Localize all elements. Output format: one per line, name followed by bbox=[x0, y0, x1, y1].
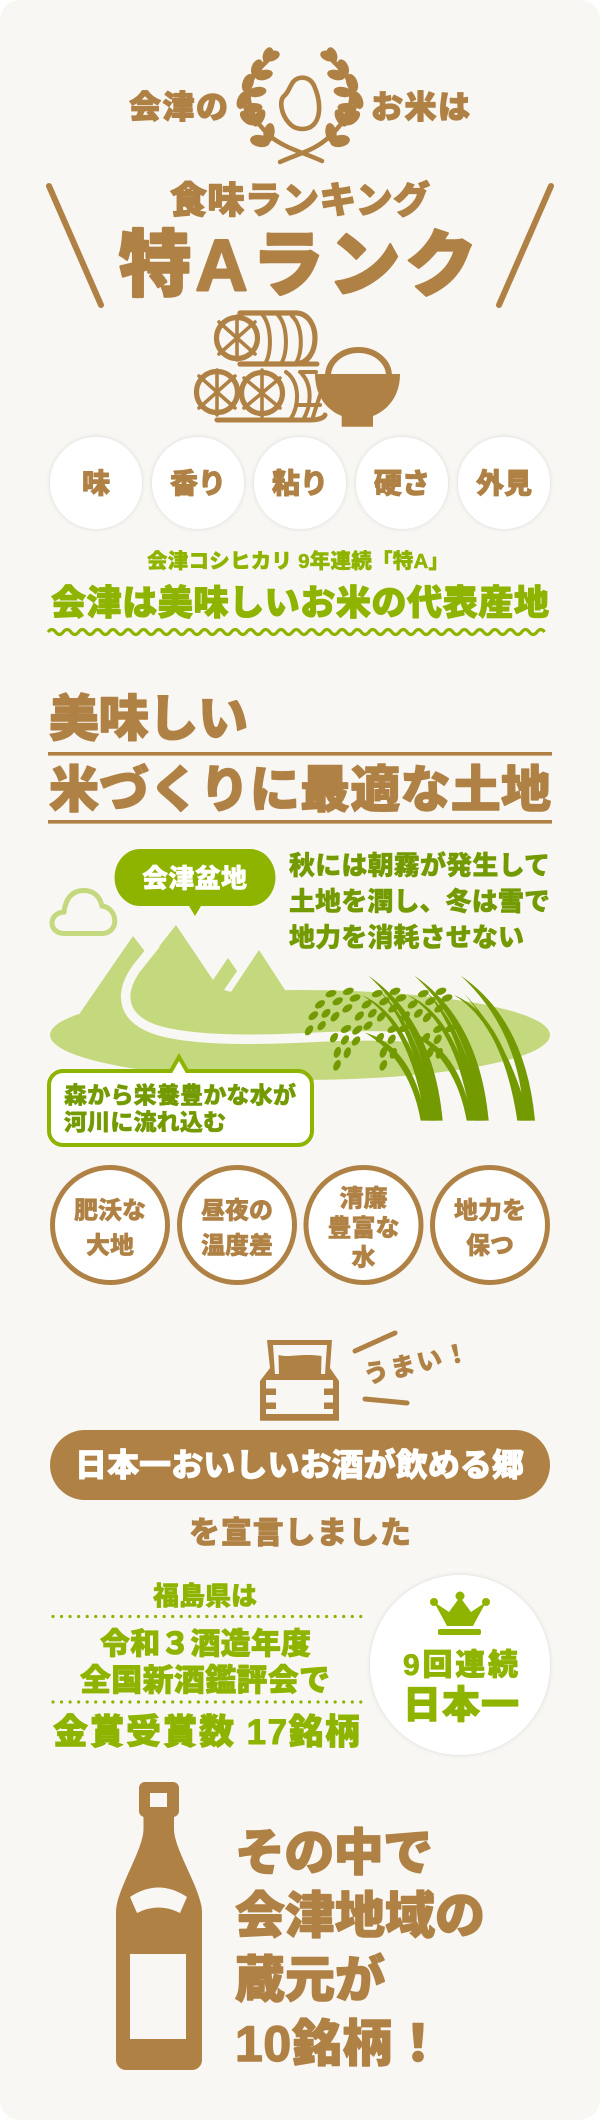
banner: best sake in Japan: 日本一おいしいお酒が飲める郷 bbox=[75, 1447, 524, 1483]
heading: 特Aランク: 特Aランク bbox=[119, 226, 477, 306]
text: 9 years Tokua: 会津コシヒカリ 9年連続「特A」 bbox=[147, 549, 449, 573]
text: 会津の: 会津の bbox=[129, 89, 228, 125]
icon: cloud bbox=[52, 890, 115, 934]
heading: 米づくりに最適な土地: 米づくりに最適な土地 bbox=[49, 762, 551, 818]
closing text: 蔵元が bbox=[235, 1952, 385, 2008]
accent: lower stroke bbox=[365, 1399, 407, 1403]
closing text: 10銘柄！ bbox=[235, 2016, 443, 2072]
text: morning mist description bbox=[289, 850, 550, 952]
text: 全国新酒鑑評会で: 全国新酒鑑評会で bbox=[80, 1663, 330, 1698]
feature circle: 清廉豊富な水 bbox=[306, 1168, 421, 1282]
divider: lower dots bbox=[53, 1700, 363, 1704]
accent: right slash bbox=[499, 186, 551, 305]
badge: 9回連続日本一: 日本一 bbox=[403, 1685, 519, 1727]
callout: forest water: 河川に流れ込む bbox=[64, 1109, 226, 1135]
closing text: その中で bbox=[235, 1825, 433, 1881]
divider: upper dots bbox=[53, 1615, 363, 1618]
feature circle: 香り bbox=[152, 437, 244, 529]
banner: best sake in Japan bbox=[50, 1430, 550, 1500]
icon: rice wreath bbox=[234, 46, 366, 162]
feature circle: 地力を保つ: 保つ bbox=[466, 1232, 514, 1260]
feature circle: 香り: 香り bbox=[170, 468, 226, 499]
closing text: 会津地域の bbox=[235, 1888, 485, 1944]
illustration: rice plants bbox=[303, 976, 535, 1121]
text: 福島県は: 福島県は bbox=[153, 1581, 257, 1611]
closing text bbox=[235, 1825, 485, 2072]
heading: 美味しい: 美味しい bbox=[49, 691, 248, 747]
text: morning mist description: 地力を消耗させない bbox=[289, 922, 524, 952]
feature circle: 地力を保つ: 地力を bbox=[454, 1198, 526, 1224]
feature circle: 清廉豊富な水: 水 bbox=[352, 1244, 376, 1272]
feature circle: 清廉豊富な水: 清廉 bbox=[340, 1186, 388, 1212]
icon: rice bowl bbox=[315, 350, 400, 427]
feature circle: 粘り bbox=[254, 437, 346, 529]
feature circle: 味: 味 bbox=[82, 468, 110, 499]
feature circle: 肥沃な大地 bbox=[52, 1168, 168, 1282]
feature circle: 粘り: 粘り bbox=[272, 468, 328, 499]
feature circle: 昼夜の温度差 bbox=[180, 1168, 294, 1282]
feature circle: 硬さ: 硬さ bbox=[374, 468, 430, 499]
feature circle: 硬さ bbox=[356, 437, 448, 529]
feature circle: 肥沃な大地: 肥沃な bbox=[74, 1198, 146, 1224]
feature circle: 昼夜の温度差: 温度差 bbox=[201, 1232, 273, 1260]
feature circle: 昼夜の温度差: 昼夜の bbox=[201, 1198, 273, 1224]
feature circle: 味 bbox=[50, 437, 142, 529]
feature circle: 肥沃な大地: 大地 bbox=[86, 1232, 134, 1260]
accent: upper stroke bbox=[355, 1333, 395, 1351]
divider: wave bbox=[48, 630, 545, 634]
heading rule: upper bbox=[48, 752, 552, 756]
text: morning mist description: 土地を潤し、冬は雪で bbox=[289, 886, 550, 916]
heading: representative rice region: 会津は美味しいお米の代表産地 bbox=[51, 584, 549, 623]
icon: sake masu bbox=[260, 1340, 339, 1421]
text: morning mist description: 秋には朝霧が発生して bbox=[289, 850, 550, 880]
text: 食味ランキング: 食味ランキング bbox=[170, 179, 430, 221]
callout: 会津盆地 bbox=[115, 849, 275, 916]
text: を宣言しました: を宣言しました bbox=[189, 1516, 411, 1550]
icon: sake bottle bbox=[116, 1782, 202, 2070]
callout: 会津盆地: 会津盆地 bbox=[142, 864, 247, 894]
feature circle: 清廉豊富な水: 豊富な bbox=[328, 1215, 400, 1242]
text: 金賞受賞数 17銘柄: 金賞受賞数 17銘柄 bbox=[53, 1713, 360, 1752]
accent: left slash bbox=[49, 186, 101, 305]
icon: rice bales bbox=[196, 313, 325, 420]
feature circle: 外見: 外見 bbox=[476, 468, 532, 499]
callout: forest water: 森から栄養豊かな水が bbox=[64, 1082, 296, 1108]
text: うまい！: うまい！ bbox=[361, 1338, 472, 1390]
badge: 9回連続日本一: 9回連続 bbox=[403, 1649, 518, 1682]
illustration: mountains and basin bbox=[50, 925, 550, 1080]
feature circle: 地力を保つ bbox=[432, 1168, 548, 1282]
text: お米は: お米は bbox=[371, 89, 470, 125]
feature circle: 外見 bbox=[458, 437, 550, 529]
heading rule: lower bbox=[48, 820, 552, 824]
badge: 9回連続日本一 bbox=[370, 1575, 550, 1755]
callout: forest water bbox=[49, 1057, 312, 1145]
text: 令和3酒造年度: 令和３酒造年度 bbox=[100, 1628, 311, 1661]
